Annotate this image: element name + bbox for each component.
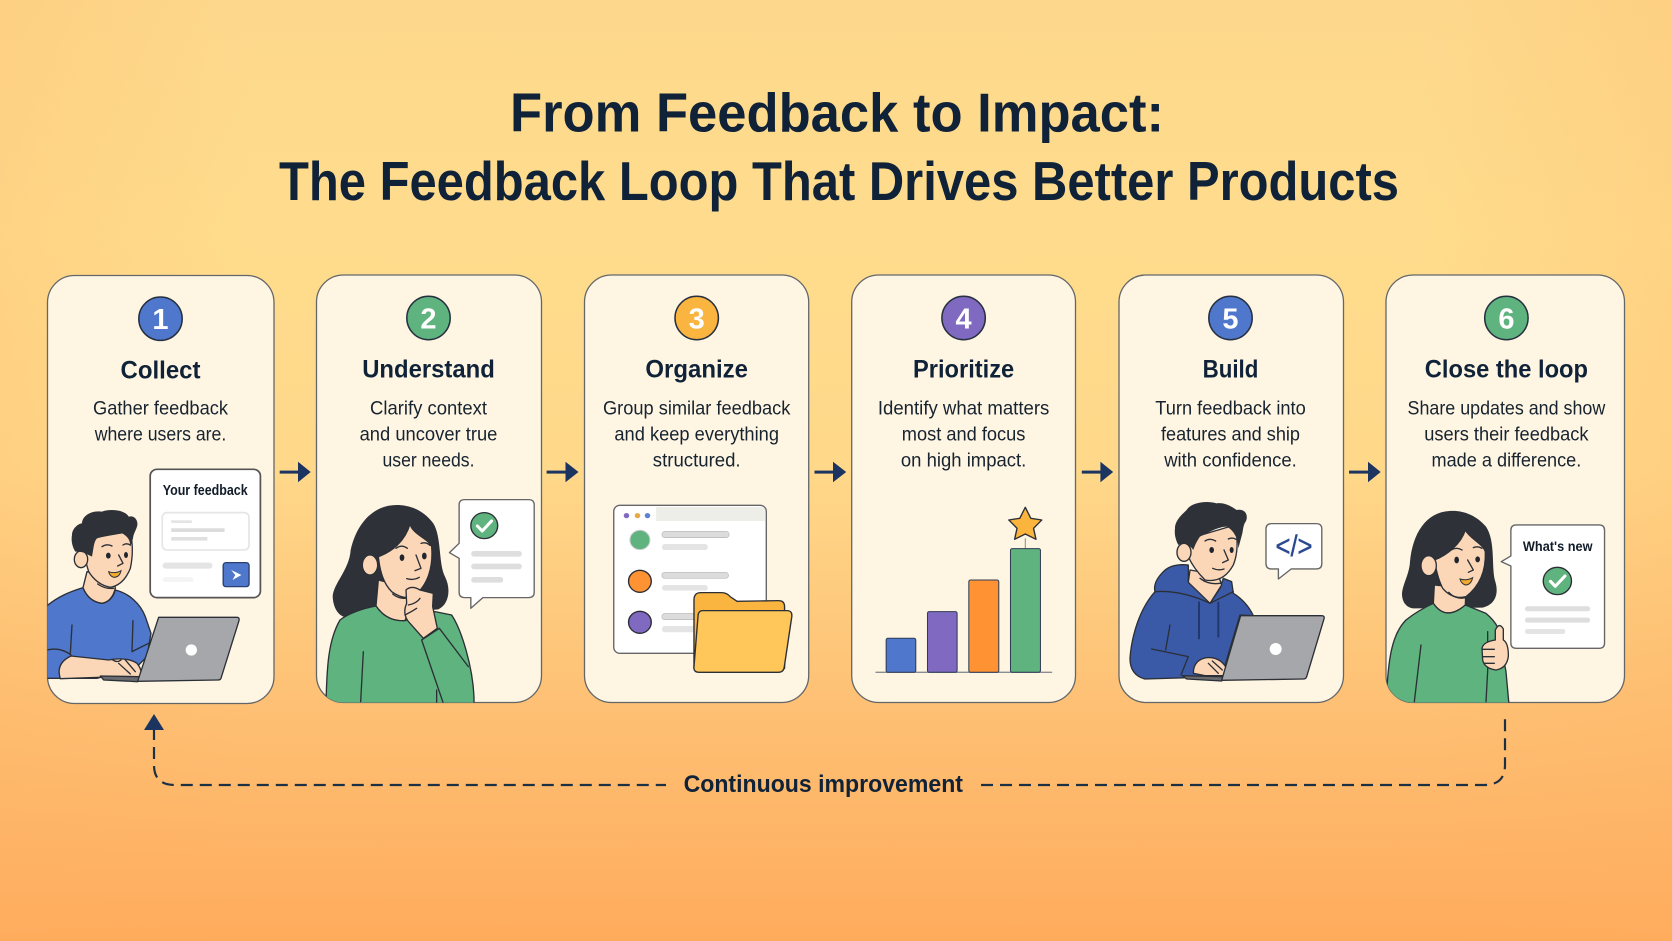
icon: code speech bubble (1266, 524, 1322, 579)
callout: what's new: What's new (1523, 538, 1593, 554)
icon: star (1009, 507, 1042, 539)
description: close the loop (1408, 397, 1606, 472)
callout: what's new (1501, 525, 1605, 648)
description: build: Turn feedback into (1155, 397, 1306, 419)
description: organize: structured. (653, 450, 741, 472)
description: build (1155, 397, 1306, 472)
description: organize (603, 397, 791, 472)
step number 1: 1 (152, 304, 169, 336)
arrow: continuous improvement loop (144, 714, 1505, 798)
panel: collect (45, 276, 274, 704)
description: prioritize (878, 397, 1050, 472)
icon: speech bubble with check (449, 500, 534, 608)
heading: Prioritize: Prioritize (913, 356, 1014, 384)
icon: feedback form card (150, 469, 260, 598)
panel: understand (316, 275, 542, 707)
description: close the loop: Share updates and show (1408, 397, 1606, 419)
description: build: with confidence. (1163, 450, 1297, 472)
illustration: developer in hoodie with laptop (1130, 502, 1324, 681)
illustration: list window and folder (614, 505, 792, 672)
description: collect: Gather feedback (93, 397, 228, 419)
description: prioritize: Identify what matters (878, 397, 1050, 419)
description: understand: Clarify context (370, 397, 488, 419)
step number 5 (1209, 296, 1252, 340)
step number 4 (942, 296, 985, 340)
arrow: build to close the loop (1349, 462, 1381, 482)
icon: code speech bubble: </> (1276, 530, 1312, 563)
step number 5: 5 (1222, 304, 1239, 336)
heading: Close the loop: Close the loop (1425, 356, 1588, 384)
description: prioritize: most and focus (902, 423, 1026, 445)
title (279, 82, 1399, 212)
icon: folder (694, 593, 792, 672)
step number 2: 2 (420, 304, 437, 336)
arrow: prioritize to build (1082, 462, 1113, 482)
label: continuous improvement: Continuous improvement (684, 771, 963, 798)
illustration: man with laptop (45, 510, 239, 682)
description: collect (93, 397, 228, 445)
heading: Organize: Organize (645, 356, 748, 384)
step number 3: 3 (689, 304, 705, 336)
panel: build (1119, 275, 1344, 702)
description: organize: Group similar feedback (603, 397, 791, 419)
description: prioritize: on high impact. (901, 450, 1026, 472)
step number 3 (675, 296, 718, 340)
panel: prioritize (852, 275, 1076, 702)
heading: Collect: Collect (120, 356, 201, 384)
step number 4: 4 (956, 304, 972, 336)
step number 2 (407, 296, 450, 340)
arrow: understand to organize (547, 462, 578, 482)
description: close the loop: made a difference. (1432, 450, 1581, 472)
panel: close the loop (1386, 275, 1624, 708)
list window (614, 505, 766, 653)
description: collect: where users are. (94, 423, 226, 445)
arrow: collect to understand (280, 462, 311, 482)
description: close the loop: users their feedback (1424, 423, 1589, 445)
step number 6 (1485, 296, 1528, 340)
description: understand (360, 397, 497, 472)
heading: Build: Build (1203, 356, 1258, 384)
heading: Understand: Understand (362, 356, 495, 384)
illustration: thinking woman (326, 505, 474, 707)
description: organize: and keep everything (614, 423, 779, 445)
description: understand: user needs. (382, 450, 474, 472)
arrow: organize to prioritize (814, 462, 846, 482)
step number 6: 6 (1498, 304, 1514, 336)
panel: organize (584, 275, 809, 702)
bar chart with star (875, 507, 1052, 672)
description: understand: and uncover true (360, 423, 497, 445)
description: build: features and ship (1161, 423, 1300, 445)
title: From Feedback to Impact: (510, 82, 1164, 144)
title: The Feedback Loop That Drives Better Products (279, 150, 1399, 212)
illustration: smiling woman with thumbs up (1386, 511, 1509, 708)
step number 1 (139, 297, 182, 340)
icon: feedback form card: Your feedback (163, 483, 248, 499)
